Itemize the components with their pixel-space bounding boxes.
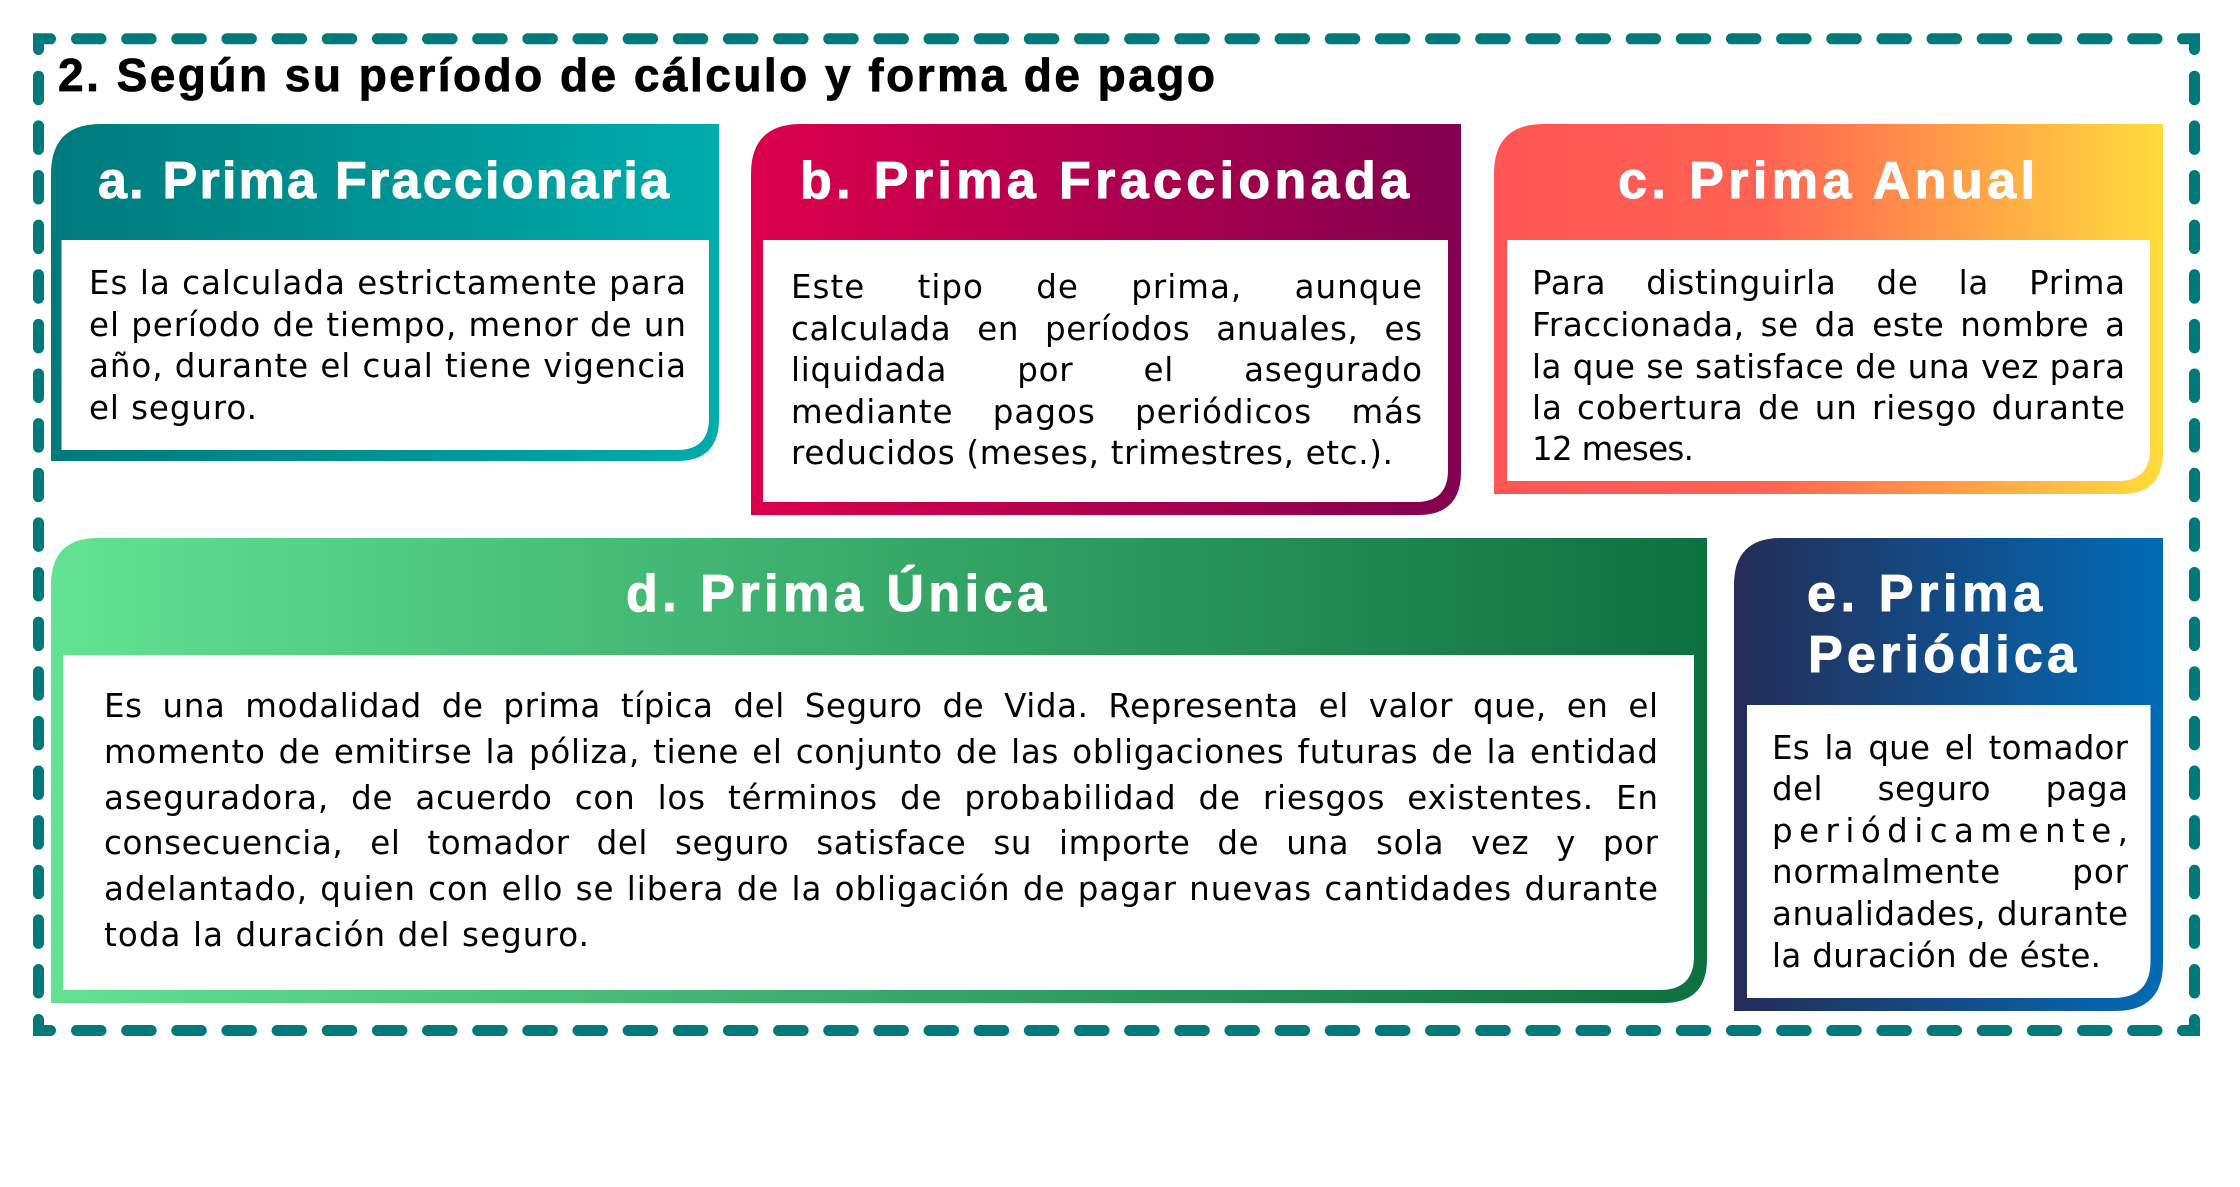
- text block: e: Es la que el tomador: [1772, 729, 2129, 767]
- text block: e: [1772, 729, 2129, 975]
- text block: e: la duración de éste.: [1772, 937, 2101, 975]
- heading: e: e. Prima: [1807, 565, 2043, 623]
- text block: a: Es la calculada estrictamente para: [89, 264, 686, 302]
- text block: c: la que se satisface de una vez para: [1532, 348, 2125, 386]
- text block: a: año, durante el cual tiene vigencia: [89, 347, 686, 385]
- text block: d: [104, 687, 1659, 954]
- title: 2. Según su período de cálculo y forma de pago: [58, 49, 1215, 101]
- text block: c: Fraccionada, se da este nombre a: [1532, 306, 2125, 344]
- heading: a: a. Prima Fraccionaria: [98, 152, 670, 210]
- text block: b: liquidada por el asegurado: [791, 351, 1422, 389]
- text block: d: toda la duración del seguro.: [104, 916, 589, 954]
- heading: b: b. Prima Fraccionada: [800, 152, 1410, 210]
- text block: b: Este tipo de prima, aunque: [791, 268, 1422, 306]
- panel: c. Prima Anual: [1494, 124, 2163, 494]
- text block: d: Es una modalidad de prima típica del Seguro de Vida. Representa el valor que, en el: [104, 687, 1658, 725]
- text block: c: la cobertura de un riesgo durante: [1532, 389, 2125, 427]
- heading: d: d. Prima Única: [626, 565, 1047, 623]
- text block: e: periódicamente,: [1772, 812, 2128, 850]
- panel: b. Prima Fraccionada: [751, 124, 1461, 515]
- panel: e. Prima Periódica: [1734, 538, 2163, 1011]
- text block: d: consecuencia, el tomador del seguro satisface su importe de una sola vez y por: [104, 824, 1659, 862]
- text block: b: reducidos (meses, trimestres, etc.).: [791, 434, 1393, 472]
- text block: e: anualidades, durante: [1772, 895, 2128, 933]
- text block: a: [89, 264, 686, 427]
- text block: d: momento de emitirse la póliza, tiene el conjunto de las obligaciones futuras de la entidad: [104, 733, 1658, 771]
- panel: a. Prima Fraccionaria: [51, 124, 719, 461]
- heading: c: c. Prima Anual: [1618, 152, 2035, 210]
- text block: e: normalmente por: [1772, 853, 2129, 891]
- text block: a: el período de tiempo, menor de un: [89, 306, 686, 344]
- text block: b: [791, 268, 1422, 472]
- heading: e: Periódica: [1808, 626, 2077, 684]
- text block: b: calculada en períodos anuales, es: [791, 310, 1422, 348]
- panel: d. Prima Única: [51, 538, 1707, 1003]
- text block: c: Para distinguirla de la Prima: [1532, 264, 2125, 302]
- text block: a: el seguro.: [89, 389, 257, 427]
- text block: e: del seguro paga: [1772, 770, 2128, 808]
- text block: d: adelantado, quien con ello se libera de la obligación de pagar nuevas cantidades durante: [104, 870, 1658, 908]
- text block: c: [1532, 264, 2125, 468]
- text block: d: aseguradora, de acuerdo con los términos de probabilidad de riesgos existentes. En: [104, 779, 1658, 817]
- text block: c: 12 meses.: [1532, 430, 1694, 468]
- text block: b: mediante pagos periódicos más: [791, 393, 1422, 431]
- heading: e: [1807, 565, 2077, 684]
